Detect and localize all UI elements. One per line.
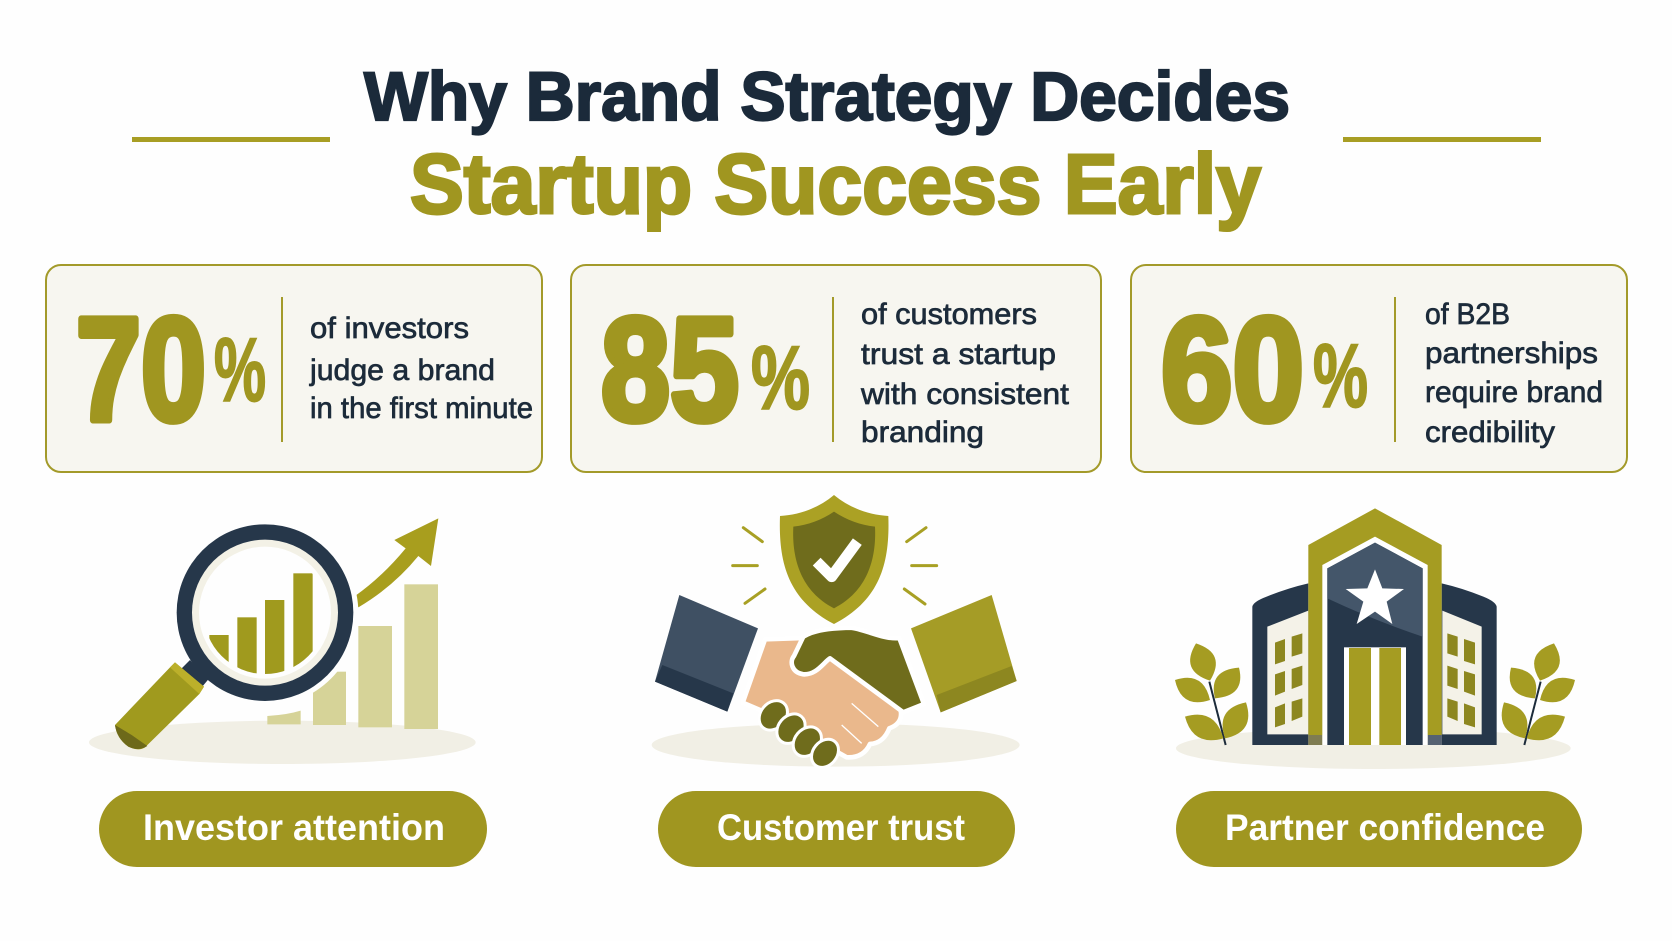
clasped hands — [743, 628, 924, 773]
description: investors — [309, 312, 533, 425]
number 60%: 60 — [1161, 288, 1304, 452]
description: investors: judge a brand — [309, 354, 495, 387]
number 70%: 70 — [76, 288, 206, 452]
shield with check — [780, 495, 889, 624]
icon: handshake with shield — [652, 495, 1020, 773]
number 85%: % — [751, 329, 810, 429]
description: investors: of investors — [310, 312, 469, 345]
left wing — [1252, 583, 1308, 745]
description: investors: in the first minute — [310, 392, 533, 425]
label pill: Customer trust: Customer trust — [717, 807, 965, 848]
description: customers: trust a startup — [861, 338, 1056, 371]
description: partnerships: partnerships — [1425, 337, 1598, 370]
description: customers: of customers — [861, 298, 1037, 331]
number 60%: % — [1313, 327, 1368, 427]
label pill: Investor attention — [99, 791, 487, 867]
label pill: Customer trust — [658, 791, 1015, 867]
panel: 70% investors stat — [46, 265, 542, 472]
description: partnerships: credibility — [1425, 416, 1555, 449]
label pill: Partner confidence — [1176, 791, 1582, 867]
central tower — [1308, 508, 1442, 745]
growth arrow — [355, 518, 438, 607]
description: partnerships: of B2B — [1425, 298, 1510, 331]
description: customers: branding — [861, 416, 984, 449]
left laurel — [1175, 643, 1248, 745]
left sleeve — [655, 595, 758, 712]
title line 2: Startup Success Early — [410, 137, 1261, 231]
title line 1: Why Brand Strategy Decides — [364, 58, 1290, 135]
right laurel — [1502, 643, 1575, 745]
right wing — [1442, 583, 1497, 745]
magnifier handle — [115, 660, 208, 749]
description: partnerships — [1425, 298, 1603, 449]
star — [1346, 569, 1404, 624]
number 70%: % — [214, 321, 266, 421]
right sleeve — [911, 595, 1017, 712]
icon: magnifying glass over growth chart — [89, 518, 476, 764]
panel: 85% customers stat — [571, 265, 1101, 472]
shine rays — [733, 528, 937, 604]
description: customers — [860, 298, 1070, 449]
magnifier lens — [172, 519, 358, 706]
description: customers: with consistent — [860, 378, 1070, 411]
description: partnerships: require brand — [1425, 376, 1603, 409]
panel: 60% partnerships stat — [1131, 265, 1627, 472]
door — [1344, 647, 1406, 745]
icon: office building with laurels — [1175, 508, 1575, 769]
label pill: Partner confidence: Partner confidence — [1225, 807, 1545, 848]
number 85%: 85 — [601, 288, 739, 452]
label pill: Investor attention: Investor attention — [143, 807, 445, 848]
title — [364, 58, 1290, 231]
